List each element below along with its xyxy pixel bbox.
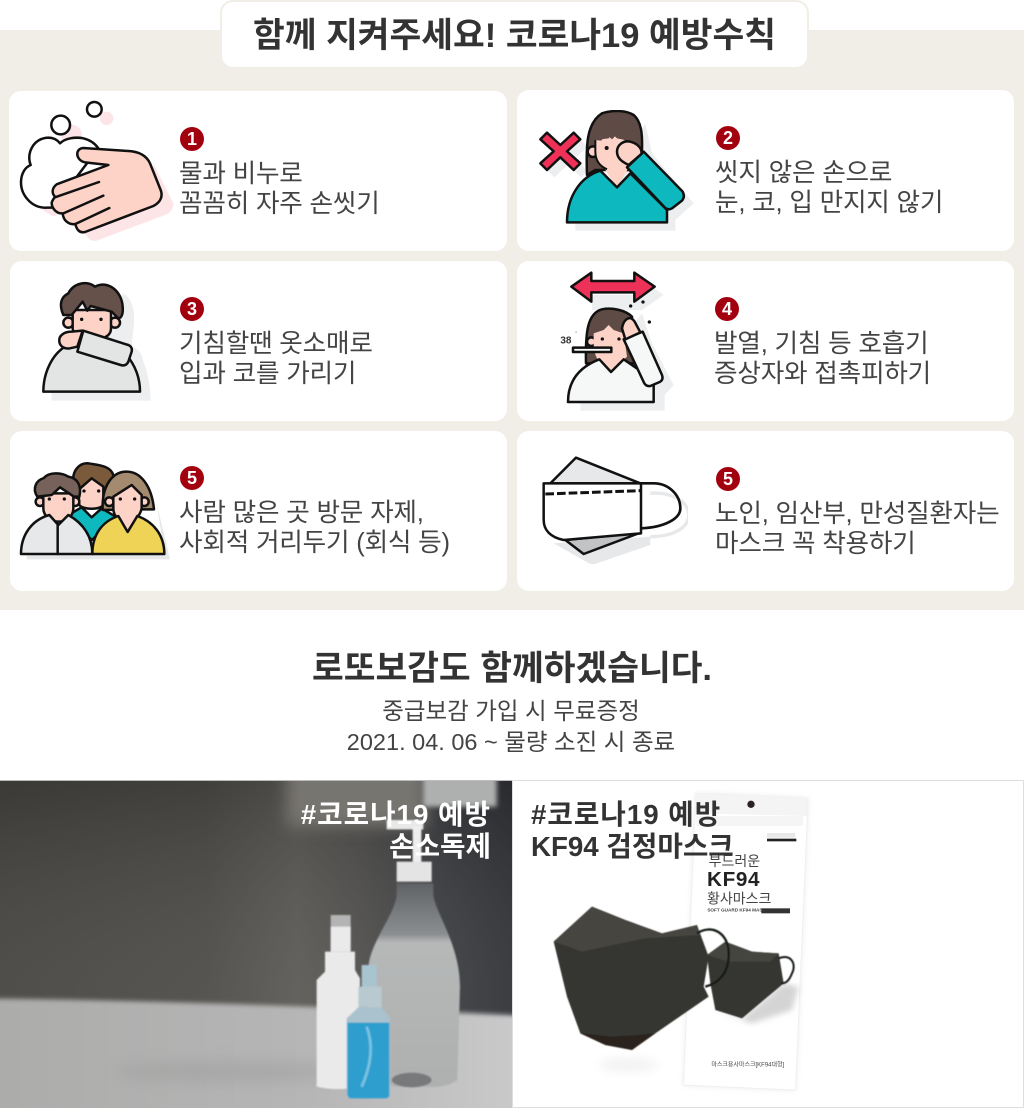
- number badge 4: [715, 297, 739, 321]
- illustration: KF94 mask and package: 황사마스크: [707, 890, 772, 906]
- text: rule 2: 씻지 않은 손으로: [715, 159, 892, 187]
- number badge 2: 2: [723, 128, 733, 148]
- text: rule 1: 꼼꼼히 자주 손씻기: [179, 190, 380, 218]
- text: giveaway details: 중급보감 가입 시 무료증정: [382, 698, 640, 724]
- icon: three people: [20, 462, 170, 560]
- text: rule 2: 눈, 코, 입 만지지 않기: [715, 189, 943, 217]
- number badge 2: [716, 126, 740, 150]
- panel: rule 3 cough etiquette: [10, 261, 507, 421]
- photo caption: [301, 799, 491, 862]
- photo caption: [531, 799, 734, 862]
- illustration: KF94 mask and package: 마스크용사마스크[KF94대형]: [711, 1061, 785, 1069]
- title: [220, 0, 809, 69]
- photo caption: KF94 검정마스크: [531, 831, 734, 862]
- text: rule 5: 사회적 거리두기 (회식 등): [179, 529, 450, 557]
- text: giveaway details: [347, 698, 675, 755]
- panel: rule 5 avoid crowds: [10, 431, 507, 591]
- photo caption: #코로나19 예방: [301, 799, 491, 830]
- panel: rule 2 do not touch face: [517, 90, 1014, 251]
- text: rule 6: 노인, 임산부, 만성질환자는: [715, 500, 999, 528]
- icon: face mask: [542, 456, 688, 564]
- text: rule 2: [715, 159, 943, 217]
- text: rule 5: 사람 많은 곳 방문 자제,: [179, 499, 424, 527]
- panel: sanitizer photo: [0, 780, 512, 1108]
- panel: rules background: [0, 30, 1024, 610]
- text: rule 5: [179, 499, 450, 557]
- text: rule 4: 발열, 기침 등 호흡기: [714, 330, 928, 358]
- number badge 3: [180, 297, 204, 321]
- number badge 5: 5: [187, 468, 197, 488]
- text: rule 4: [714, 330, 931, 388]
- text: giveaway details: 2021. 04. 06 ~ 물량 소진 시 종료: [347, 729, 675, 755]
- text: rule 3: [179, 330, 373, 388]
- text: rule 1: 물과 비누로: [179, 160, 303, 188]
- icon: feverish person with arrow: ˚: [575, 331, 577, 338]
- icon: person coughing into sleeve: [42, 282, 150, 400]
- number badge 4: 4: [722, 299, 732, 319]
- illustration: KF94 mask and package: 부드러운: [709, 853, 760, 869]
- text: rule 1: [179, 160, 380, 218]
- photo caption: 손소독제: [389, 831, 491, 862]
- text: rule 6: 마스크 꼭 착용하기: [715, 530, 916, 558]
- panel: rule 6 wear mask: [517, 431, 1014, 591]
- text: rule 3: 입과 코를 가리기: [179, 360, 356, 388]
- panel: KF94 mask photo: [512, 780, 1024, 1108]
- photo caption: #코로나19 예방: [531, 799, 721, 830]
- text: rule 3: 기침할땐 옷소매로: [179, 330, 373, 358]
- number badge 3: 3: [187, 299, 197, 319]
- icon: feverish person with arrow: 38: [560, 335, 572, 346]
- text: rule 4: 증상자와 접촉피하기: [714, 360, 931, 388]
- illustration: KF94 mask and package: KF94: [707, 868, 760, 891]
- number badge 1: 1: [187, 129, 197, 149]
- illustration: KF94 mask and package: SOFT GUARD KF94 MASK: [707, 907, 766, 912]
- title: 함께 지켜주세요! 코로나19 예방수칙: [253, 17, 776, 55]
- number badge 5: [180, 466, 204, 490]
- icon: feverish person with arrow: [560, 271, 674, 410]
- panel: rule 4 avoid contact: [517, 261, 1014, 421]
- illustration: sanitizer bottles: [0, 780, 512, 1108]
- icon: washing hand: [20, 100, 174, 241]
- icon: person touching eye with cross: [539, 110, 694, 230]
- number badge 6: [716, 467, 740, 491]
- text: rule 6: [715, 500, 999, 558]
- panel: rule 1 wash hands: [9, 91, 507, 251]
- number badge 6: 5: [723, 469, 733, 489]
- illustration: KF94 mask and package: [553, 792, 809, 1091]
- number badge 1: [180, 127, 204, 151]
- heading: giveaway: 로또보감도 함께하겠습니다.: [312, 650, 712, 688]
